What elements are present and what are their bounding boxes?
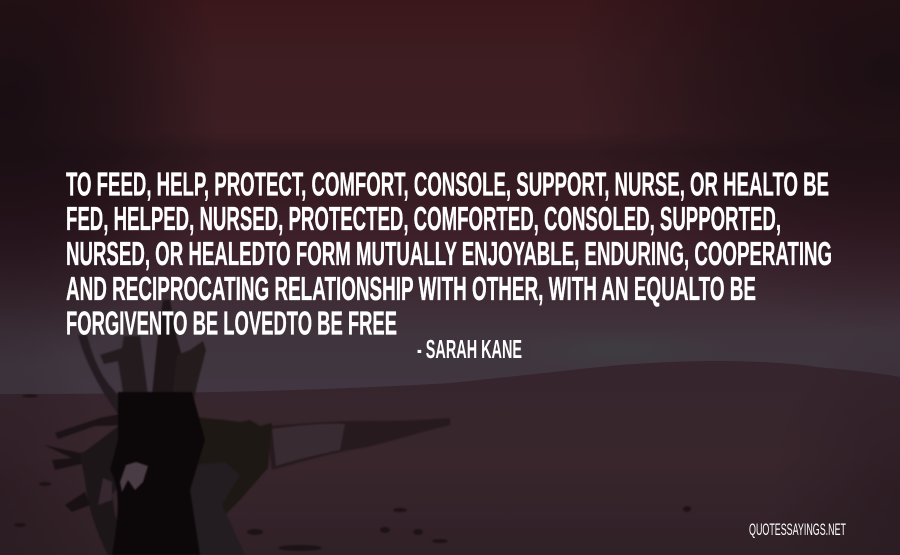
background: grey sky patch bbox=[500, 325, 740, 375]
background: lower left shadow bbox=[0, 320, 110, 555]
quote text: FORGIVENTO BE LOVEDTO BE FREE bbox=[66, 304, 397, 342]
quote text bbox=[66, 166, 832, 342]
quote author: - SARAH KANE bbox=[417, 334, 522, 364]
background: lower right shadow bbox=[770, 320, 900, 555]
background: left sky shadow bbox=[0, 0, 230, 370]
background: right sky shadow bbox=[570, 0, 900, 330]
background: beach sand bbox=[0, 361, 900, 555]
background: beach pebbles bbox=[14, 394, 691, 551]
icon: driftwood root silhouette bbox=[44, 300, 272, 555]
background: driftwood trunk bbox=[265, 418, 450, 470]
